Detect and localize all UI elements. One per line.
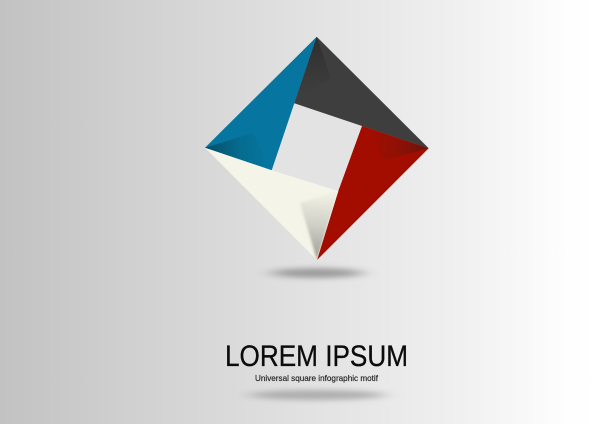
diamond logo	[205, 37, 429, 260]
dark grey panel	[294, 37, 429, 148]
text shadow	[249, 390, 385, 400]
subtitle: Universal square infographic motif	[255, 373, 379, 383]
cream panel	[205, 148, 338, 260]
diamond shadow	[271, 268, 363, 278]
blue panel	[205, 37, 317, 170]
red panel	[317, 126, 429, 260]
title: LOREM IPSUM	[225, 340, 408, 373]
inner square	[272, 103, 362, 191]
